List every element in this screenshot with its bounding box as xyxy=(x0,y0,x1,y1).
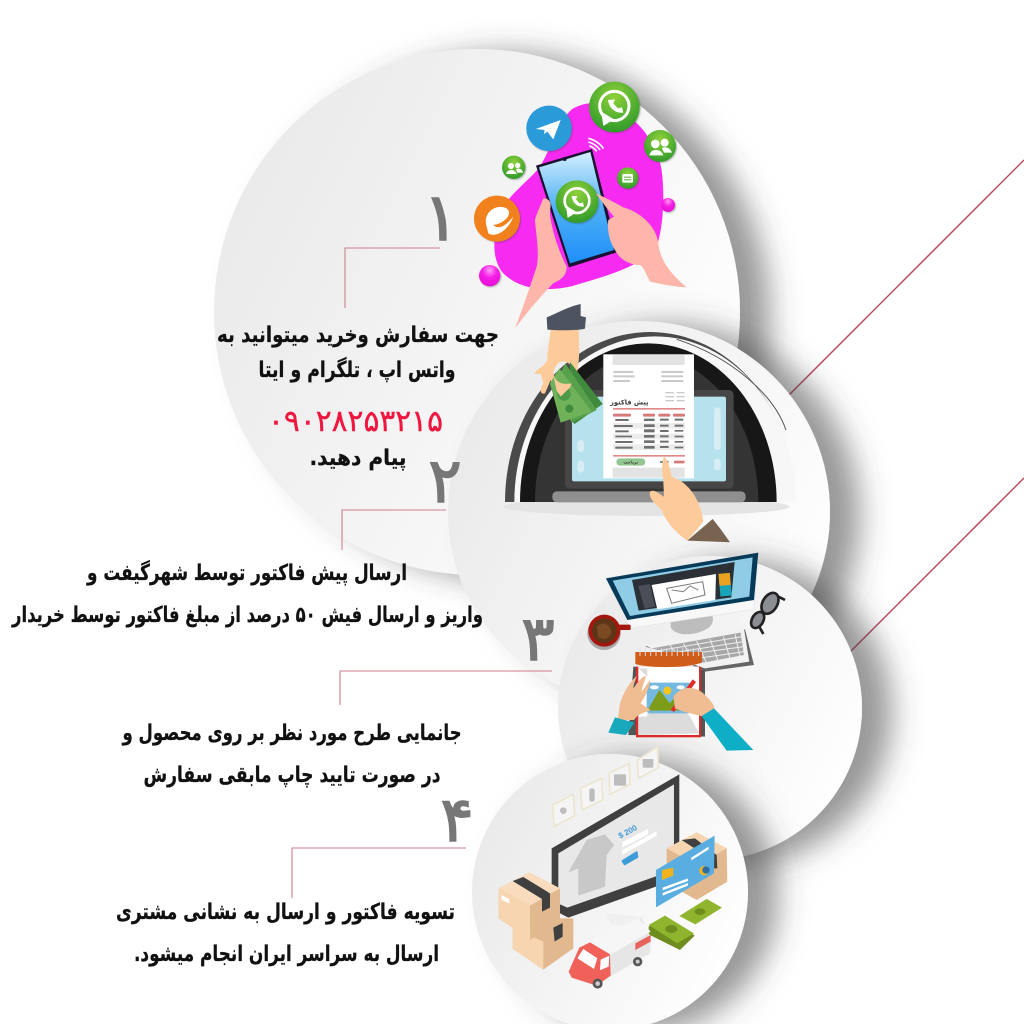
circle panel 1 xyxy=(214,49,740,575)
step 4 text xyxy=(116,900,455,967)
right sleeve xyxy=(702,708,753,751)
hand left xyxy=(515,198,567,328)
step 2 text xyxy=(11,559,483,628)
sleeve xyxy=(547,304,586,330)
box behind card xyxy=(667,832,727,900)
step 1 line 1: جهت سفارش وخرید میتوانید به xyxy=(217,323,499,348)
laptop screen xyxy=(565,390,734,489)
banknotes xyxy=(550,362,603,424)
floor shadow xyxy=(504,497,789,516)
product lines xyxy=(622,829,657,855)
icon: group left xyxy=(502,156,525,179)
left hand xyxy=(618,676,651,720)
illustration: invoice on laptop xyxy=(504,304,790,542)
icon: message small xyxy=(617,167,638,189)
pencil xyxy=(671,679,696,712)
brown sleeve xyxy=(687,519,730,542)
step 3 line 2: در صورت تایید چاپ مابقی سفارش xyxy=(144,763,440,788)
picture on pad xyxy=(647,683,691,713)
step 3 text xyxy=(122,721,462,788)
pointing hand xyxy=(650,457,703,541)
step 1 leader line xyxy=(345,248,440,308)
hand right xyxy=(596,193,687,287)
phone xyxy=(536,149,618,267)
stacked boxes xyxy=(499,872,573,970)
step 2 leader line xyxy=(342,510,446,550)
step 4 line 1: تسویه فاکتور و ارسال به نشانی مشتری xyxy=(116,900,455,925)
step 2 number: ۲ xyxy=(428,444,462,517)
monitor xyxy=(606,553,758,628)
price: $ 200 xyxy=(617,823,639,841)
pay button xyxy=(616,458,645,466)
dark arch xyxy=(505,332,778,502)
step 3 line 1: جانمایی طرح مورد نظر بر روی محصول و xyxy=(122,721,462,746)
step 3 number: ۳ xyxy=(521,602,555,675)
monitor stand xyxy=(671,613,713,634)
laptop base xyxy=(552,491,746,502)
step 2 line 2: واریز و ارسال فیش ۵۰ درصد از مبلغ فاکتور توسط خریدار xyxy=(11,603,483,628)
icon: group right xyxy=(644,130,676,162)
step 1 line 2: واتس اپ ، تلگرام و ایتا xyxy=(258,356,456,383)
circle panel 3 xyxy=(558,556,862,860)
decorative diagonal line 2 xyxy=(845,478,1024,657)
left sleeve xyxy=(608,717,634,735)
magenta ball left xyxy=(479,265,500,286)
t-shirt xyxy=(568,834,614,896)
money stack xyxy=(649,899,722,950)
circle panel 2 xyxy=(448,321,830,703)
invoice paper xyxy=(603,354,694,478)
illustration: checkout and delivery xyxy=(499,747,727,989)
step 1 line 3: پیام دهید. xyxy=(310,446,406,471)
invoice paper: پرداخت xyxy=(623,460,638,465)
credit card xyxy=(656,836,715,907)
coffee cup xyxy=(587,615,631,650)
drawing pad xyxy=(628,648,705,737)
step 4 line 2: ارسال به سراسر ایران انجام میشود. xyxy=(134,942,439,967)
step 4 number: ۴ xyxy=(440,783,474,856)
step 4 leader line xyxy=(292,848,466,898)
step 3 leader line xyxy=(340,671,552,705)
fingers over money xyxy=(553,375,572,397)
screen highlights xyxy=(577,407,721,473)
icon glyphs xyxy=(560,759,653,814)
step 2 line 1: ارسال پیش فاکتور توسط شهرگیفت و xyxy=(86,559,407,586)
icon row: search, dollar, grid, cart xyxy=(553,747,658,827)
magenta blob xyxy=(494,103,663,289)
magenta ball right xyxy=(661,198,675,212)
invoice title: پیش فاکتور xyxy=(609,399,649,407)
decorative diagonal line 1 xyxy=(780,160,1024,404)
step 1 text xyxy=(217,323,499,471)
keyboard xyxy=(645,629,754,672)
illustration: designer desk xyxy=(587,553,785,751)
monitor xyxy=(552,774,679,925)
delivery truck xyxy=(569,918,651,989)
icon: whatsapp center xyxy=(556,180,598,223)
phone number: ۰۹۰۲۸۲۵۳۲۱۵ xyxy=(268,404,443,439)
icon: wifi arcs xyxy=(588,138,603,151)
icon: telegram xyxy=(526,106,572,151)
circle panel 4 xyxy=(472,754,748,1024)
icon: whatsapp large xyxy=(589,82,640,132)
right hand xyxy=(673,688,714,717)
icon: orange e xyxy=(474,196,520,242)
illustration: phone with messaging icons xyxy=(474,82,687,328)
glasses xyxy=(748,590,785,634)
step 1 number: ۱ xyxy=(423,179,459,256)
buy button xyxy=(623,852,637,864)
hand giving money xyxy=(535,328,579,397)
thin arc on the right xyxy=(677,339,786,430)
